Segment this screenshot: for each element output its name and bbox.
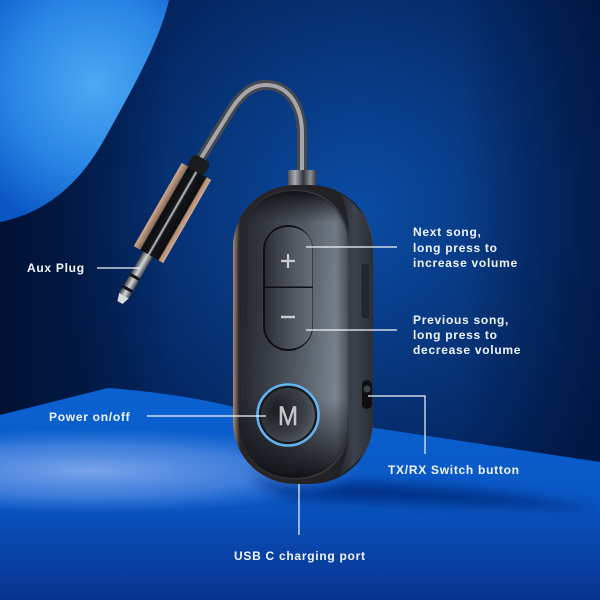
device outer shell — [233, 185, 373, 484]
label: next song: increase volume — [413, 256, 518, 270]
top and bottom shading — [239, 191, 349, 478]
label: switch: TX/RX Switch button — [388, 463, 520, 477]
label: usb c: USB C charging port — [234, 549, 366, 563]
device side panel — [335, 193, 373, 477]
label: previous song: Previous song, — [413, 313, 509, 327]
label: next song: Next song, — [413, 225, 482, 239]
label: next song: long press to — [413, 241, 498, 255]
leader lines — [97, 247, 425, 535]
M glyph: M — [278, 401, 298, 431]
power button — [258, 384, 318, 446]
minus glyph — [281, 316, 295, 318]
cable collar — [288, 170, 316, 186]
label: aux plug: Aux Plug — [27, 261, 85, 275]
plus glyph — [281, 254, 295, 268]
label: power: Power on/off — [49, 410, 131, 424]
blue floor surface — [0, 388, 600, 600]
glow ring — [258, 384, 318, 446]
light blue curved shape — [0, 0, 169, 222]
plug strain relief — [186, 153, 211, 176]
aux cable — [198, 85, 302, 172]
device shadow — [250, 470, 600, 510]
label: previous song: decrease volume — [413, 343, 521, 357]
plug barrel — [134, 163, 211, 263]
minus button — [265, 288, 312, 349]
plug tip — [115, 251, 153, 305]
plus button — [265, 227, 312, 286]
speaker grille — [361, 263, 370, 319]
switch — [362, 380, 372, 409]
button surround — [263, 225, 313, 351]
label: previous song: long press to — [413, 328, 498, 342]
button face — [261, 388, 315, 442]
button group — [263, 225, 313, 351]
aux plug — [115, 153, 211, 305]
device front face — [239, 191, 349, 478]
device — [233, 185, 373, 484]
